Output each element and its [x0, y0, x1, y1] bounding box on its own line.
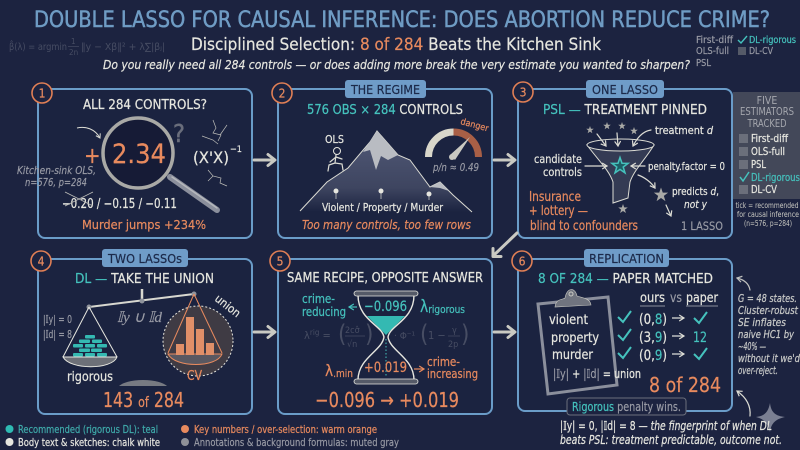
mountain	[300, 131, 472, 212]
panel 6: replication	[512, 249, 732, 415]
crime outcome list: property	[551, 331, 599, 346]
balance scale	[63, 289, 233, 386]
background formula: lambda rig: γ	[452, 326, 457, 336]
estimator list: First-diff	[751, 132, 789, 145]
tag: one lasso: ONE LASSO	[592, 82, 658, 97]
background formula: lambda rig: · Φ⁻¹	[394, 331, 416, 342]
insurance note: + lottery —	[529, 204, 588, 219]
treatment label: treatment d	[655, 124, 714, 137]
panel 5 heading: SAME RECIPE, OPPOSITE ANSWER	[287, 271, 483, 286]
background formula: lambda rig: (	[420, 320, 428, 348]
estimator list	[739, 132, 800, 196]
colour legend: Annotations & background formulas: muted gray	[194, 436, 399, 449]
colour legend: Key numbers / over-selection: warm orange	[194, 423, 377, 436]
insurance note: Insurance	[529, 190, 581, 205]
background formula: lasso objective	[9, 37, 165, 57]
background formula: lambda rig: (	[338, 320, 346, 348]
icon: sparkle	[756, 403, 785, 432]
icon: funnel with stars	[586, 122, 668, 213]
crime-increasing label: crime-	[427, 355, 460, 369]
top legend	[696, 35, 797, 69]
comparison header	[640, 291, 718, 306]
step badge 4	[31, 251, 51, 271]
step badge 6: 6	[519, 254, 526, 268]
background formula: lambda rig: rig	[310, 328, 319, 337]
estimator list: PSL	[751, 158, 766, 171]
candidate controls label: controls	[543, 165, 582, 179]
candidate controls label	[534, 152, 607, 179]
comparison header: ours	[640, 291, 665, 306]
panel 3: one lasso	[513, 80, 732, 238]
comparison table: (0,8)	[639, 312, 667, 328]
panel 4: two lassos	[31, 249, 252, 414]
union identity: |𝕀y| + |𝕀d| = union	[553, 366, 641, 381]
crime outcome list: violent	[549, 313, 588, 328]
arrow: 4 to 5	[254, 326, 275, 338]
predicts label	[638, 175, 719, 216]
colour legend: Recommended (rigorous DL): teal	[18, 423, 158, 436]
panel 1: all 284 controls	[17, 83, 252, 238]
arrow: 3 to 5	[493, 233, 517, 256]
step badge 6	[512, 251, 532, 271]
fingerprint note	[560, 419, 782, 447]
step badge 3	[513, 82, 533, 102]
panel 5: same recipe opposite answer	[270, 251, 492, 414]
set counts: |𝕀y| = 0	[43, 313, 72, 326]
estimate: lambda min: +0.019	[364, 360, 407, 376]
matrix inverse with cracks: −1	[230, 145, 242, 155]
crime-reducing label: crime-	[302, 292, 335, 306]
tag: replication: REPLICATION	[589, 251, 664, 266]
cluster note: ~40% —	[738, 340, 766, 353]
insurance note	[529, 190, 638, 234]
background formula: lasso objective: β̂(λ) = argmin	[9, 39, 67, 53]
matrix inverse with cracks	[193, 120, 242, 186]
rigorous label: rigorous	[67, 370, 113, 385]
CV label: CV	[187, 369, 202, 384]
background formula: lambda rig: )	[461, 320, 469, 348]
predicts label: predicts d,	[672, 185, 719, 198]
lasso count: 1 LASSO	[681, 219, 723, 233]
background formula: lasso objective: 2n	[69, 48, 78, 57]
cluster note: SE inflates	[738, 316, 786, 329]
title: DOUBLE LASSO FOR CAUSAL INFERENCE: DOES ABORTION REDUCE CRIME?	[34, 8, 770, 33]
tagline question: Do you really need all 284 controls — or does adding more break the very estimate you wanted to sharpen?	[103, 57, 690, 72]
callout: rigorous penalty wins: Rigorous penalty wins.	[572, 400, 681, 414]
sidebar: five estimators tracked: FIVE	[757, 95, 777, 107]
sidebar: five estimators tracked: TRACKED	[747, 118, 786, 130]
panel 2: the regime	[272, 80, 492, 238]
orange bars: CV	[176, 317, 214, 355]
subtitle: Disciplined Selection: 8 of 284 Beats the Kitchen Sink	[191, 35, 601, 55]
set counts: |𝕀d| = 8	[43, 328, 72, 341]
icon: clipboard	[538, 289, 617, 394]
step badge 4: 4	[38, 254, 45, 268]
icon: magnifying glass	[77, 118, 217, 210]
colour legend: Body text & sketches: chalk white	[18, 436, 160, 449]
background formula: lambda rig	[304, 320, 469, 350]
background formula: lambda rig: 1 −	[428, 329, 446, 342]
set counts	[43, 313, 72, 341]
step badge 2: 2	[279, 86, 285, 100]
step badge 1: 1	[39, 86, 45, 100]
comparison table: (0,9)	[639, 348, 667, 364]
arrow: note to panel 6	[737, 391, 750, 416]
panel 6 heading: 8 OF 284 — PAPER MATCHED	[538, 272, 713, 287]
danger gauge: danger	[459, 117, 490, 134]
candidate controls label: candidate	[534, 152, 582, 166]
background formula: lambda rig: )	[365, 320, 373, 348]
background formula: lambda rig: =	[319, 329, 331, 342]
sidebar: five estimators tracked	[733, 92, 800, 228]
comparison table: (3,9)	[639, 330, 667, 346]
tag: one lasso	[586, 80, 664, 98]
comparison table: 12	[693, 330, 707, 346]
sidebar footnote	[736, 201, 799, 228]
step badge 5	[270, 251, 290, 271]
panel 3 heading: PSL — TREATMENT PINNED	[543, 103, 707, 118]
top legend: DL-CV	[749, 46, 773, 57]
arrow: 5 to 6	[494, 326, 515, 338]
matrix inverse with cracks: (X'X)	[193, 148, 229, 167]
fingerprint note: |𝕀y| = 0, |𝕀d| = 8 — the fingerprint of when DL	[560, 419, 772, 433]
top legend: First-diff	[696, 35, 734, 46]
estimator list: DL-CV	[751, 183, 777, 196]
count 143 of 284: 143 of 284	[103, 388, 184, 412]
cluster note: over-reject.	[738, 364, 778, 377]
step badge 1	[32, 83, 52, 103]
panel 1 heading: ALL 284 CONTROLS?	[83, 98, 207, 113]
danger gauge: p/n ≈ 0.49	[432, 161, 479, 174]
top legend: PSL	[696, 58, 711, 69]
step badge 3: 3	[520, 86, 526, 100]
panel 2 heading: 576 OBS × 284 CONTROLS	[307, 103, 463, 118]
top legend: OLS-full	[696, 46, 729, 57]
comparison header: vs	[670, 291, 682, 306]
estimate: rigorous: −0.096	[364, 299, 407, 315]
lambda min label: .min	[333, 368, 353, 380]
crime-increasing label: increasing	[427, 367, 478, 381]
union formula: 𝕀y ∪ 𝕀d	[117, 310, 162, 326]
estimator list: OLS-full	[751, 145, 785, 158]
flip result: −0.096 → +0.019	[315, 388, 459, 412]
predicts label: not y	[684, 198, 707, 211]
sidebar: five estimators tracked: ESTIMATORS	[740, 106, 794, 118]
union label: union	[212, 291, 244, 320]
icon: magnifying glass: ?	[173, 119, 185, 148]
colour legend	[6, 423, 399, 449]
crime-reducing label: reducing	[302, 305, 346, 319]
background formula: lambda rig: 2cσ̂	[345, 325, 360, 336]
baseline estimates	[62, 192, 177, 212]
background formula: lasso objective: ‖y − Xβ‖² + λ∑|βⱼ|	[81, 42, 165, 53]
kitchen-sink note: Kitchen-sink OLS,	[17, 165, 96, 177]
step badge 5: 5	[277, 254, 283, 268]
kitchen-sink note	[17, 165, 96, 189]
lambda rigorous label: rigorous	[428, 303, 465, 316]
background formula: lambda rig: √n	[347, 339, 357, 350]
top legend: DL-rigorous	[749, 35, 797, 46]
arrow: 2 to 3	[494, 154, 515, 166]
crime outcome list	[549, 313, 599, 363]
tag: the regime: THE REGIME	[350, 82, 420, 97]
icon: magnifying glass: 2.34	[112, 139, 166, 170]
comparison table	[618, 311, 707, 364]
background formula: lambda rig: λ	[304, 329, 310, 342]
comparison header: paper	[686, 291, 718, 306]
teal bricks: rigorous	[73, 335, 107, 356]
icon: magnifying glass: +	[84, 144, 101, 169]
step badge 2	[272, 83, 292, 103]
murder jump callout: Murder jumps +234%	[82, 217, 206, 232]
panel 4 heading: DL — TAKE THE UNION	[75, 272, 214, 287]
arrow: 1 to 2	[254, 154, 275, 166]
danger gauge	[428, 117, 490, 174]
kitchen-sink note: n=576, p=284	[25, 177, 87, 189]
background formula: lambda rig: 2p	[448, 340, 458, 350]
outcome labels: Violent / Property / Murder	[322, 201, 444, 214]
icon: hourglass	[354, 291, 418, 384]
lambda rigorous label: λ	[420, 297, 429, 317]
cluster note	[737, 278, 800, 377]
insurance note: blind to confounders	[530, 219, 638, 234]
too many controls callout: Too many controls, too few rows	[302, 217, 471, 232]
tag: two lassos: TWO LASSOs	[107, 251, 182, 266]
background formula: lasso objective: 1	[71, 37, 76, 46]
lambda min label: λ	[325, 361, 334, 380]
penalty factor label: penalty.factor = 0	[648, 160, 725, 173]
count 8 of 284: 8 of 284	[649, 373, 721, 397]
baseline estimates: −0.20 / −0.15 / −0.11	[62, 197, 177, 212]
crime-reducing label	[302, 292, 357, 319]
icon: OLS climber: OLS	[325, 133, 344, 146]
crime outcome list: murder	[552, 348, 593, 363]
crime-increasing label	[414, 355, 478, 381]
icon: OLS climber	[325, 133, 344, 171]
